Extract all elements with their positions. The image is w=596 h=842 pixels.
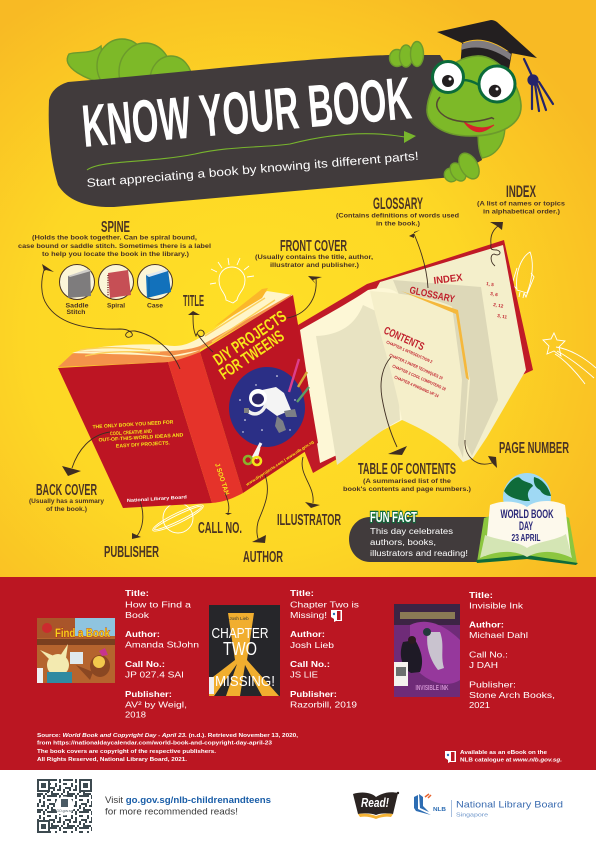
head [427, 56, 521, 136]
page numbers: 2, 12 [493, 302, 504, 309]
book 2 details: Publisher: [290, 689, 337, 699]
ebook note [445, 750, 562, 764]
icon: rocket doodle [512, 252, 534, 298]
icon: case bound book: Case [147, 302, 163, 310]
label: glossary [336, 194, 459, 228]
fun fact text: authors, books, [370, 538, 436, 547]
qr code [37, 779, 92, 833]
book 3 details: Stone Arch Books, [469, 690, 555, 700]
book 2 details: Chapter Two is [290, 600, 359, 610]
label: spine: (Holds the book together. Can be spiral bound, [32, 234, 197, 242]
panel: recommended books [0, 577, 596, 770]
cap top [437, 20, 537, 58]
label: index: INDEX [506, 182, 536, 201]
book 2 details: Razorbill, 2019 [290, 700, 357, 710]
arrow: index [490, 222, 503, 266]
back cover publisher: National Library Board [127, 494, 187, 503]
page numbers: 3, 11 [497, 313, 508, 320]
book 1 details [125, 588, 199, 720]
book 3 details: Michael Dahl [469, 630, 528, 640]
icon: spiral book [98, 264, 134, 310]
red board [298, 240, 533, 473]
contents list: CHAPTER 3 COOL COMPUTERS 18 [392, 363, 447, 392]
label: back cover: (Usually has a summary [29, 498, 104, 505]
book 1 details: Call No.: [125, 659, 165, 669]
label: glossary: (Contains definitions of words used [336, 212, 459, 220]
book 1 details: Book [125, 610, 150, 620]
book 2 details: JS LIE [290, 670, 318, 680]
icon: scissors [244, 443, 261, 465]
badge text: WORLD BOOK [500, 509, 554, 521]
spine [168, 352, 243, 503]
text: TITLE [183, 293, 204, 310]
logo: national library board: National Library Board [456, 800, 563, 810]
mascot body behind banner [67, 39, 192, 104]
book 2 details: Call No.: [290, 659, 330, 669]
back cover blurb: OUT-OF-THIS-WORLD IDEAS AND [98, 432, 184, 444]
label: front cover [255, 238, 373, 269]
book cover: how to find a book [37, 618, 115, 683]
label: call no: CALL NO. [198, 520, 242, 537]
logo: read: Read! [361, 795, 390, 810]
book 2 details: Title: [290, 588, 314, 598]
book title: DIY PROJECTS [210, 307, 290, 369]
book 1 details: How to Find a [125, 600, 191, 610]
label: spine: SPINE [101, 219, 130, 236]
book 2 details [290, 588, 359, 710]
subtitle: Start appreciating a book by knowing its different parts! [86, 149, 419, 190]
book cover: chapter two is missing: TWO [223, 639, 257, 659]
book cover: chapter two is missing: Josh Lieb [229, 616, 249, 621]
icon: saddle stitch book: Saddle [66, 302, 89, 310]
back cover blurb: COOL, CREATIVE AND [110, 429, 152, 437]
arrow: table of contents [381, 357, 407, 455]
label: table of contents: TABLE OF CONTENTS [358, 461, 456, 478]
book 1 details: Author: [125, 629, 160, 639]
label: table of contents: (A summarised list of the [363, 478, 451, 485]
right page [370, 245, 526, 462]
label: table of contents: book's contents and page numbers.) [343, 486, 471, 493]
icon: shooting star doodle [543, 333, 596, 384]
background [0, 0, 596, 578]
visit text: Visit go.gov.sg/nlb-childrenandteens [105, 795, 271, 805]
ebook note: NLB catalogue at www.nlb.gov.sg. [460, 758, 562, 764]
book 3 details: Author: [469, 620, 504, 630]
logo: national library board [414, 794, 563, 818]
book 2 details: Author: [290, 629, 325, 639]
label: glossary: GLOSSARY [373, 194, 423, 213]
icon: light bulb doodle [210, 258, 254, 303]
mascot: bookworm with graduation cap [390, 20, 553, 185]
label: spine: to help you locate the book in the library.) [42, 251, 189, 258]
book cover: chapter two is missing: CHAPTER [212, 625, 269, 642]
label: index [477, 182, 566, 216]
callout: fun fact [349, 509, 490, 562]
book 3 details [469, 590, 555, 710]
back cover blurb: THE ONLY BOOK YOU NEED FOR [92, 420, 174, 430]
label: spine [18, 219, 211, 258]
open book [477, 516, 577, 563]
badge text: 23 APRIL [512, 533, 540, 544]
icon: spiral book: Spiral [107, 302, 125, 310]
label: author: AUTHOR [243, 549, 283, 566]
label: back cover [29, 482, 104, 513]
book 3 details: Title: [469, 590, 493, 600]
tassel [524, 59, 553, 111]
book cover: how to find a book: Find a Book [55, 626, 110, 640]
page numbers: 1, 5 [486, 281, 495, 287]
icon: ebook [331, 610, 342, 622]
glasses and eyes [432, 62, 515, 102]
book 1 details: Publisher: [125, 689, 172, 699]
badge text [500, 509, 554, 544]
arrow: title [188, 311, 213, 352]
fun fact text: illustrators and reading! [370, 549, 468, 558]
icon: saddle stitch book: Stitch [66, 309, 86, 316]
source note: All Rights Reserved, National Library Board, 2021. [37, 757, 188, 763]
hand lower [442, 150, 483, 185]
contents heading: CONTENTS [382, 325, 426, 353]
contents list: CHAPTER 2 PAPER TECHNIQUES 10 [389, 352, 444, 381]
source note [37, 733, 299, 763]
label: back cover: of the book.) [46, 506, 87, 513]
back cover blurb: EASY DIY PROJECTS. [116, 440, 171, 450]
arrow: back cover [62, 432, 110, 476]
book title [210, 307, 290, 383]
icon: saddle stitch book [60, 264, 94, 316]
front cover [200, 295, 318, 493]
icon: case bound book [138, 264, 172, 310]
book 3 details: Call No.: [469, 650, 508, 660]
visit text: for more recommended reads! [105, 806, 238, 816]
arrow: front cover [287, 276, 322, 318]
contents list [386, 339, 447, 399]
hand upper [390, 42, 424, 67]
page numbers [486, 281, 508, 320]
index heading: INDEX [433, 272, 463, 287]
fun fact text: This day celebrates [370, 527, 453, 536]
pages left [58, 338, 200, 367]
book 3 details: 2021 [469, 700, 490, 710]
contents list: CHAPTER 4 FINISHING UP 24 [394, 374, 440, 399]
book cover: chapter two is missing: MISSING! [215, 673, 275, 690]
arrow: illustrator [302, 457, 320, 508]
book 2 details: Missing! [290, 610, 327, 620]
book 1 details: 2018 [125, 710, 146, 720]
back cover blurb [92, 420, 184, 450]
icon: pencils [289, 359, 309, 402]
label: front cover: illustrator and publisher.) [270, 262, 359, 269]
icon: world book day badge [476, 473, 578, 565]
open book back section: right pages [298, 240, 533, 473]
website strip: www.diyprojects.com | www.nlb.gov.sg [244, 439, 315, 487]
source note: Source: World Book and Copyright Day - April 23. (n.d.). Retrieved November 13, 2020, [37, 733, 299, 739]
book 2 details: Josh Lieb [290, 640, 334, 650]
left page [300, 288, 405, 463]
label: index: in alphabetical order.) [483, 208, 560, 216]
label: publisher: PUBLISHER [104, 544, 159, 561]
back cover [58, 362, 212, 508]
icon: planet doodle [151, 501, 205, 535]
glossary heading: GLOSSARY [408, 285, 456, 306]
label: front cover: FRONT COVER [280, 238, 347, 255]
arrow: page number [465, 440, 497, 468]
book cover: chapter two is missing [209, 605, 280, 696]
label: illustrator: ILLUSTRATOR [277, 512, 341, 529]
source note: The book covers are copyright of the respective publishers. [37, 749, 217, 755]
book cover: invisible ink [394, 604, 460, 697]
icon: astronaut [244, 387, 297, 433]
logo: national library board: Singapore [456, 812, 488, 818]
label: table of contents [343, 461, 471, 493]
arrow: spine [42, 264, 180, 369]
book 3 details: Invisible Ink [469, 600, 524, 610]
arrow: green wavy [87, 131, 416, 170]
label: front cover: (Usually contains the title, author, [255, 254, 373, 261]
arrow: call no [225, 493, 232, 515]
book 3 details: Publisher: [469, 680, 516, 690]
book cover: invisible ink: INVISIBLE INK [416, 685, 448, 692]
book 1 details: AV² by Weigl, [125, 700, 187, 710]
label: index: (A list of names or topics [477, 200, 566, 208]
contents page [370, 291, 470, 462]
page edge strip [401, 291, 469, 380]
visit text [105, 795, 271, 816]
title banner [49, 55, 482, 207]
source note: from https://nationaldaycalendar.com/world-book-and-copyright-day-april-23 [37, 740, 272, 746]
panel: footer [0, 770, 596, 842]
book 1 details: JP 027.4 SAI [125, 670, 184, 680]
fun fact text [370, 527, 468, 558]
spine author: J SOO TAN [213, 462, 230, 496]
book 1 details: Title: [125, 588, 149, 598]
ebook note: Available as an eBook on the [460, 750, 547, 756]
mouth [437, 97, 494, 132]
book 1 details: Amanda StJohn [125, 640, 199, 650]
arrow: publisher [132, 501, 143, 539]
arrow: author [252, 475, 267, 543]
logo: read [353, 792, 399, 819]
neck [478, 125, 505, 158]
fun fact heading: FUN FACT [370, 509, 417, 526]
logo: national library board: NLB [433, 807, 446, 813]
badge text: DAY [519, 521, 533, 533]
qr code: GO.gov.sg [56, 809, 73, 813]
open book front section: closed side [58, 288, 318, 508]
globe [503, 473, 551, 521]
icon: graduation cap back [460, 41, 512, 75]
cover illustration: space [229, 359, 309, 465]
contents list: CHAPTER 1 INTRODUCTION 2 [386, 339, 434, 364]
arrow: glossary [409, 230, 428, 288]
page numbers: 3, 6 [490, 291, 499, 297]
label: spine: case bound or saddle stitch. Sometimes there is a label [18, 243, 211, 250]
book title: FOR TWEENS [216, 327, 288, 383]
label: glossary: in the book.) [376, 220, 420, 228]
label: back cover: BACK COVER [36, 482, 97, 499]
book 3 details: J DAH [469, 660, 498, 670]
